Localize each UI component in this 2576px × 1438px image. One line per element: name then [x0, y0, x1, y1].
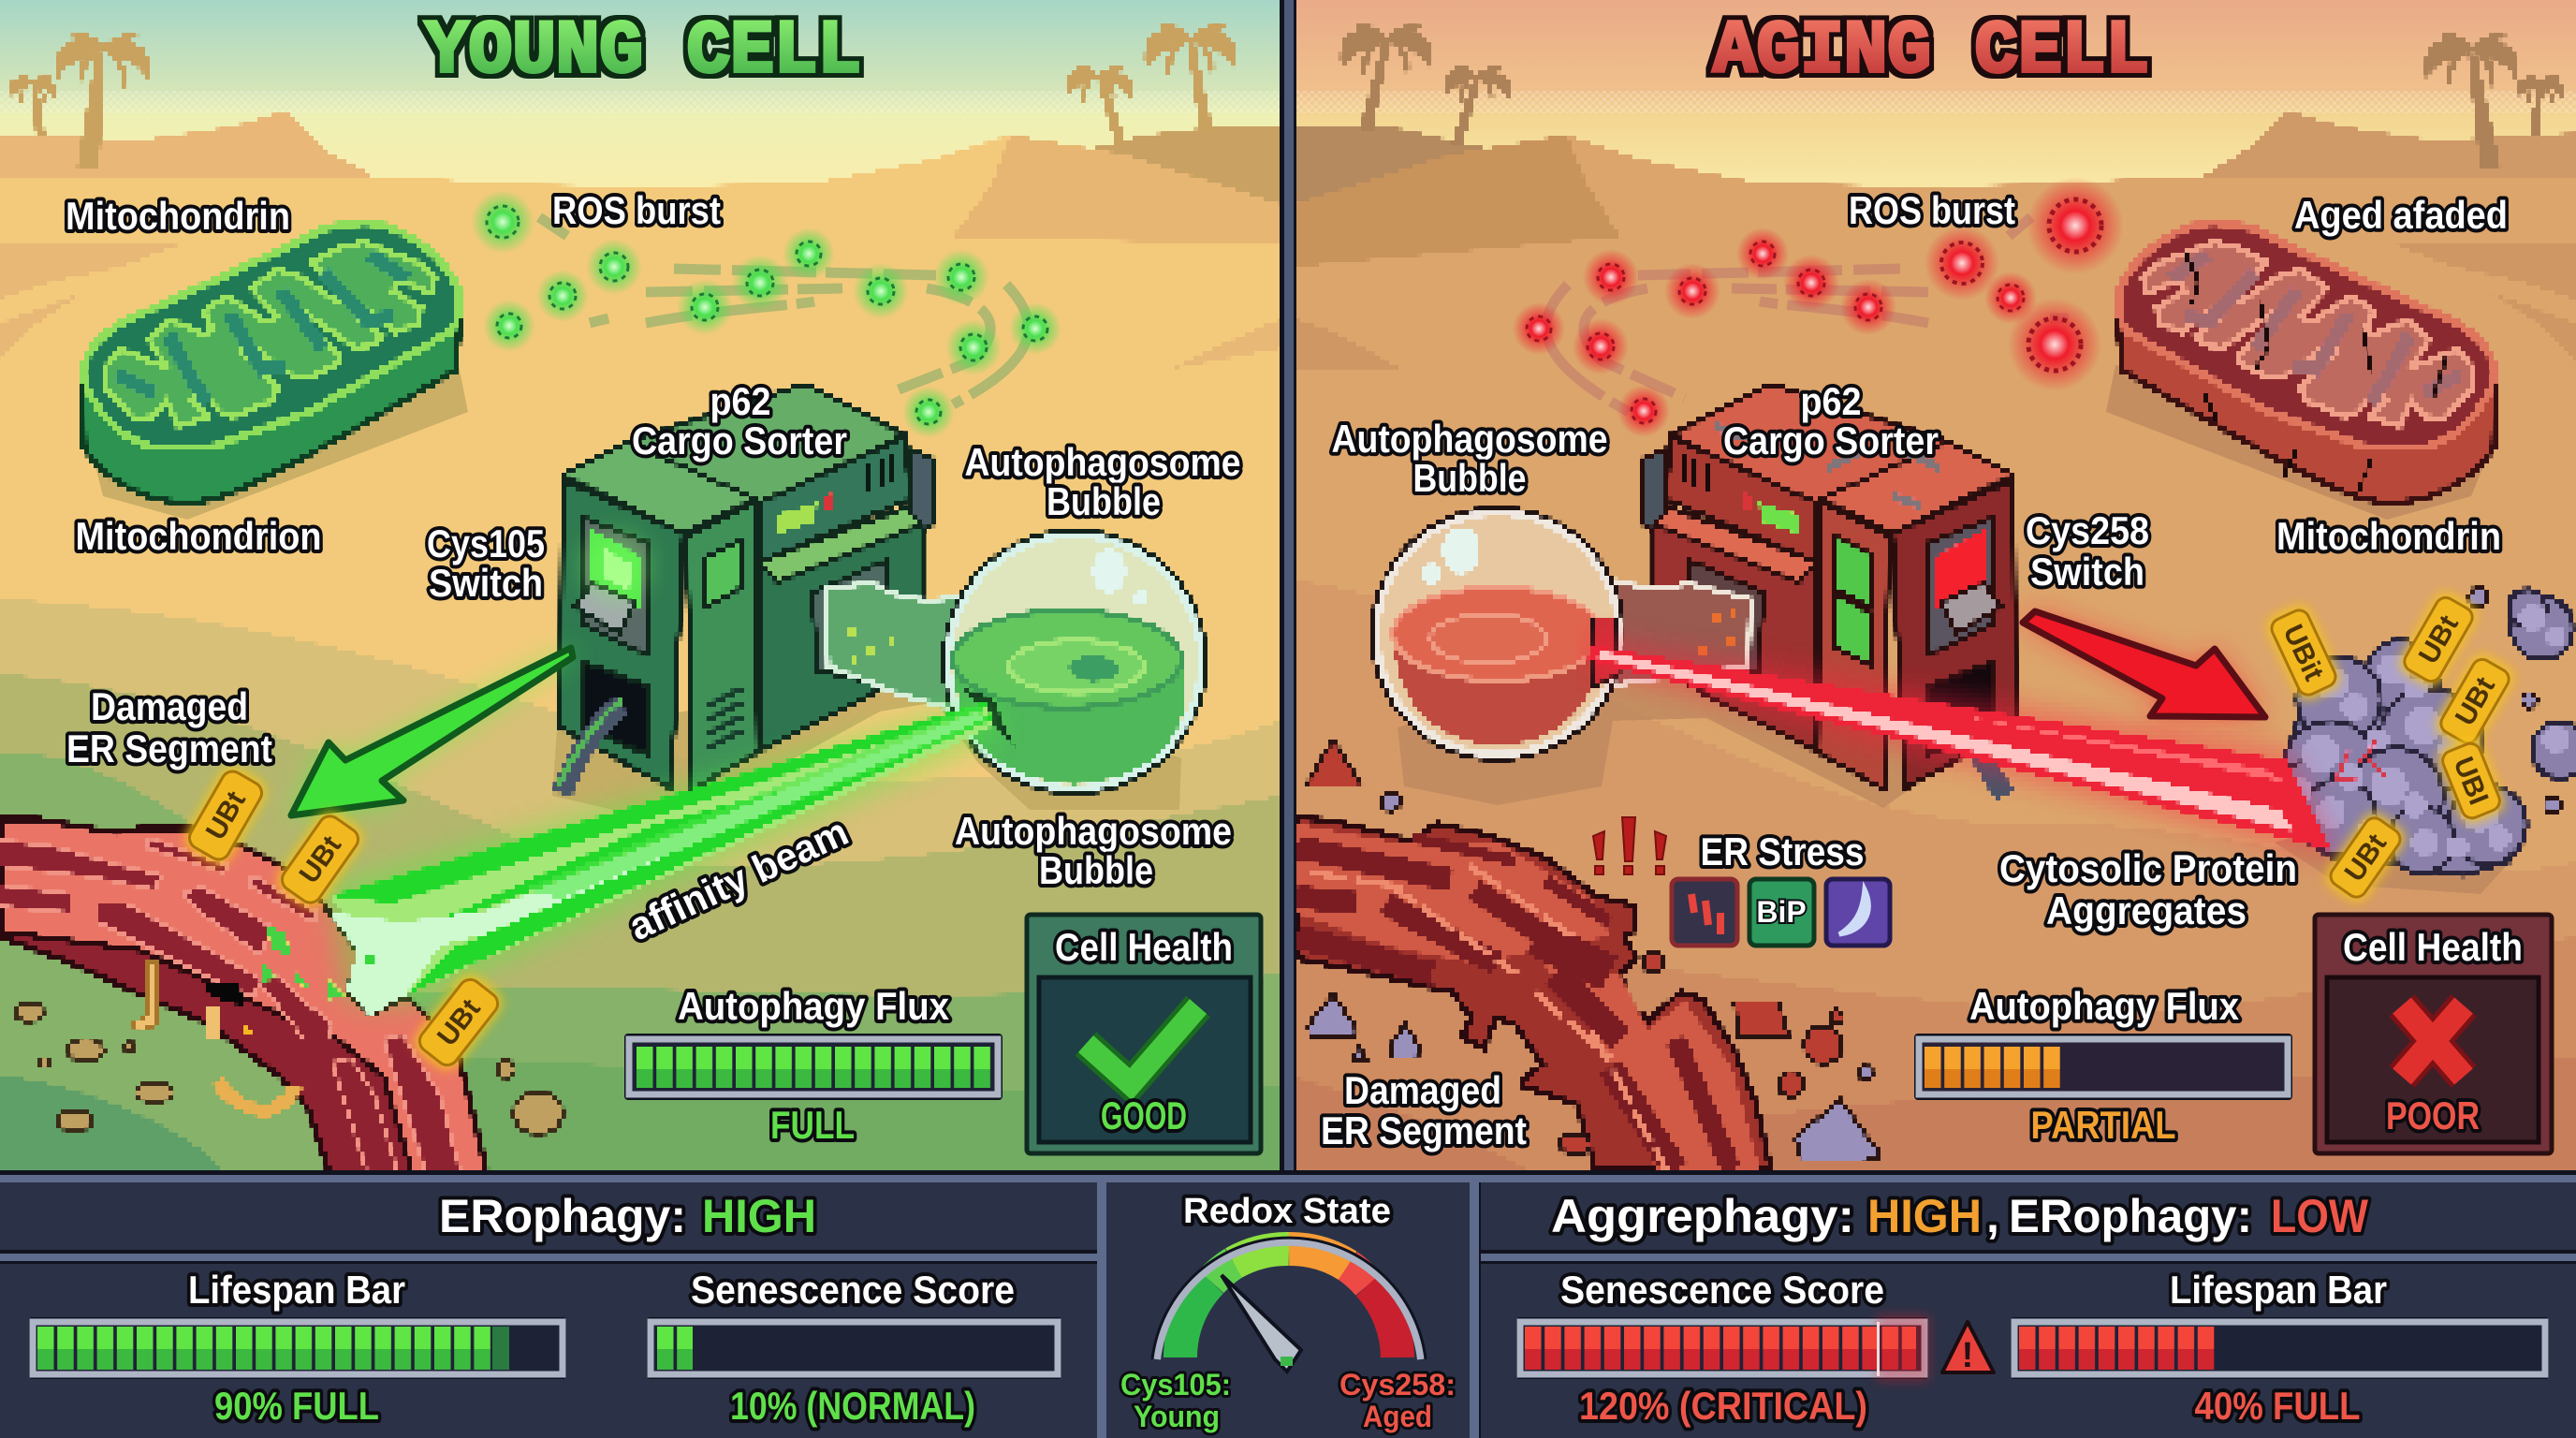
label: damaged ER segment: ER Segment — [66, 726, 272, 770]
cell health: good: GOOD — [1101, 1093, 1187, 1137]
label: autophagosome bubble — [1331, 417, 1608, 500]
label: ROS burst: ROS burst — [1849, 188, 2015, 232]
label: autophagosome bubble bottom: Bubble — [1039, 848, 1153, 892]
label: affinity beam: affinity beam — [622, 809, 855, 948]
ROS trail — [539, 217, 1028, 404]
label: Cys258 switch — [2026, 508, 2149, 594]
label: cytosolic protein aggregates: Cytosolic Protein — [1999, 846, 2297, 890]
senescence score young: Senescence Score — [691, 1268, 1015, 1312]
label: p62 cargo sorter: Cargo Sorter — [1723, 418, 1939, 462]
sky background — [1295, 0, 2576, 253]
ubiquitin tags: UBit — [2277, 620, 2330, 685]
ubiquitin tags: UBt — [294, 830, 347, 889]
lifespan bar aging: Lifespan Bar — [2170, 1268, 2387, 1312]
ubiquitin tags: UBt — [2413, 610, 2465, 669]
label: autophagosome bubble: Bubble — [1413, 456, 1526, 500]
sky background — [0, 0, 1281, 253]
cytosolic aggregate cluster — [2274, 590, 2576, 875]
cell health: poor: Cell Health — [2343, 925, 2523, 969]
icon: misfolded proteins — [1672, 879, 1737, 946]
pointer arrow — [2023, 611, 2265, 717]
icon: BiP chaperone — [1749, 879, 1814, 946]
pointer arrow — [291, 648, 573, 815]
label: autophagosome bubble top: Bubble — [1046, 479, 1161, 523]
heading: aggrephagy and ERophagy: HIGH — [1867, 1190, 1982, 1242]
senescence score aging — [1516, 1268, 1929, 1428]
desert dunes and ground — [1295, 110, 2576, 1172]
senescence score young — [647, 1268, 1061, 1428]
label: damaged ER segment — [1321, 1068, 1527, 1152]
label: p62 cargo sorter — [1723, 379, 1939, 462]
rocks — [15, 1003, 563, 1134]
autophagosome flask — [826, 531, 1206, 793]
redox state gauge — [1120, 1192, 1456, 1433]
label: p62 cargo sorter: p62 — [1801, 379, 1861, 423]
label: autophagosome bubble top — [964, 440, 1241, 523]
p62 cargo sorter machine — [1644, 384, 2015, 796]
label: Cys258 switch: Cys258 — [2026, 508, 2149, 552]
autophagy flux meter: FULL — [770, 1103, 855, 1147]
autophagy flux meter — [624, 984, 1003, 1147]
icon: BiP chaperone: BiP — [1756, 895, 1807, 929]
cell health: good — [1027, 915, 1261, 1153]
ubiquitin tags — [2264, 589, 2517, 905]
desert dunes and ground — [0, 110, 1281, 1172]
heading: aggrephagy and ERophagy — [1551, 1190, 2369, 1242]
label: autophagosome bubble bottom: Autophagosome — [955, 809, 1232, 853]
gauge arc — [1180, 1249, 1398, 1357]
label: Cys105 switch: Switch — [429, 561, 543, 605]
label: p62 cargo sorter — [632, 379, 847, 462]
label: damaged ER segment: ER Segment — [1321, 1108, 1527, 1152]
heading: aggrephagy and ERophagy: LOW — [2271, 1190, 2369, 1242]
ROS trail — [1546, 217, 2069, 412]
affinity beam — [329, 697, 1002, 1016]
label: p62 cargo sorter: p62 — [710, 379, 771, 423]
redox state gauge: Aged — [1363, 1400, 1432, 1433]
heading: ERophagy high — [439, 1190, 816, 1242]
heading: ERophagy high: ERophagy: — [439, 1190, 686, 1242]
heading: aggrephagy and ERophagy: Aggrephagy: — [1551, 1190, 1854, 1242]
rubble — [1306, 588, 2560, 1161]
label: ROS burst: ROS burst — [552, 188, 721, 232]
label: cytosolic protein aggregates — [1999, 846, 2297, 932]
bottom dashboard — [0, 1170, 2576, 1438]
label: autophagosome bubble: Autophagosome — [1331, 417, 1608, 461]
palm trees — [8, 24, 1237, 170]
title: aging cell: AGING CELL — [1713, 9, 2149, 95]
center divider — [1280, 0, 1296, 1174]
ubiquitin tags: UBI — [2448, 753, 2495, 809]
shadows — [89, 365, 1181, 824]
label: cytosolic protein aggregates: Aggregates — [2046, 888, 2247, 932]
dashboard frame — [0, 1170, 2576, 1438]
heading: aggrephagy and ERophagy: , — [1986, 1190, 1999, 1242]
autophagy flux meter: Autophagy Flux — [678, 984, 950, 1028]
ER fragmented segment — [1296, 817, 1771, 1170]
title: young cell: YOUNG CELL — [425, 9, 861, 95]
ubiquitin tags: UBt — [432, 993, 487, 1051]
label: mitochondrion: Mitochondrion — [75, 514, 322, 558]
senescence score aging: 120% (CRITICAL) — [1579, 1384, 1867, 1428]
ubiquitin tags — [181, 763, 506, 1074]
icon: aged mitochondrion — [2116, 223, 2496, 503]
lifespan bar aging: 40% FULL — [2194, 1384, 2361, 1428]
autophagy flux meter — [1914, 984, 2292, 1147]
label: aged afaded: Aged afaded — [2294, 193, 2508, 237]
ROS particles — [471, 190, 1061, 438]
screen glow — [584, 535, 648, 598]
cell health: good: Cell Health — [1055, 925, 1233, 969]
label: damaged ER segment: Damaged — [91, 684, 248, 728]
autophagy flux meter: Autophagy Flux — [1969, 984, 2240, 1028]
icon: warning triangle — [1942, 1322, 1994, 1375]
icon: crescent — [1826, 879, 1890, 946]
cell health: poor: POOR — [2386, 1093, 2480, 1137]
lifespan bar young: Lifespan Bar — [188, 1268, 405, 1312]
label: damaged ER segment — [66, 684, 272, 770]
lifespan bar aging — [2011, 1268, 2549, 1428]
lifespan bar young: 90% FULL — [214, 1384, 379, 1428]
label: autophagosome bubble bottom — [955, 809, 1232, 892]
palm trees — [1340, 24, 2565, 170]
autophagy flux meter: PARTIAL — [2031, 1103, 2175, 1147]
redox state gauge: Cys258: — [1339, 1368, 1456, 1401]
gauge needle — [1222, 1275, 1301, 1372]
label: Cys105 switch: Cys105 — [427, 521, 545, 565]
ubiquitin tags: UBt — [2339, 829, 2393, 888]
senescence score young: 10% (NORMAL) — [730, 1384, 975, 1428]
label: Cys105 switch — [427, 521, 545, 605]
panel: young cell scene — [0, 0, 1281, 1172]
label: mitochondrin: Mitochondrin — [66, 194, 290, 238]
ubiquitin tags: UBt — [2450, 672, 2501, 731]
affinity beam — [1587, 637, 2340, 861]
icon: warning triangle: ! — [1962, 1336, 1973, 1375]
label: damaged ER segment: Damaged — [1344, 1068, 1501, 1112]
senescence score aging: Senescence Score — [1560, 1268, 1884, 1312]
cell health: poor — [2315, 915, 2552, 1153]
icon: mitochondrion — [82, 223, 461, 503]
label: ER stress: ER Stress — [1700, 829, 1865, 873]
label: Cys258 switch: Switch — [2030, 550, 2144, 594]
label: p62 cargo sorter: Cargo Sorter — [632, 418, 847, 462]
ER stress icons — [1672, 879, 1890, 946]
shadows — [1398, 365, 2527, 894]
redox state gauge: Young — [1134, 1400, 1220, 1433]
p62 cargo sorter machine — [558, 384, 932, 794]
label: mitochondrin: Mitochondrin — [2276, 514, 2501, 558]
heading: aggrephagy and ERophagy: ERophagy: — [2009, 1190, 2252, 1242]
icon: ER stress warning marks — [1593, 817, 1666, 874]
redox state gauge: Redox State — [1183, 1192, 1391, 1231]
ER damaged segment — [0, 819, 487, 1172]
ROS particles — [1513, 177, 2124, 437]
redox state gauge: Cys105: — [1120, 1368, 1231, 1401]
ubiquitin tags: UBt — [200, 786, 252, 845]
autophagosome flask — [1372, 508, 1750, 759]
panel: aging cell scene — [1295, 0, 2576, 1172]
heading: ERophagy high: HIGH — [702, 1190, 816, 1242]
lifespan bar young — [29, 1268, 566, 1428]
label: autophagosome bubble top: Autophagosome — [964, 440, 1241, 484]
